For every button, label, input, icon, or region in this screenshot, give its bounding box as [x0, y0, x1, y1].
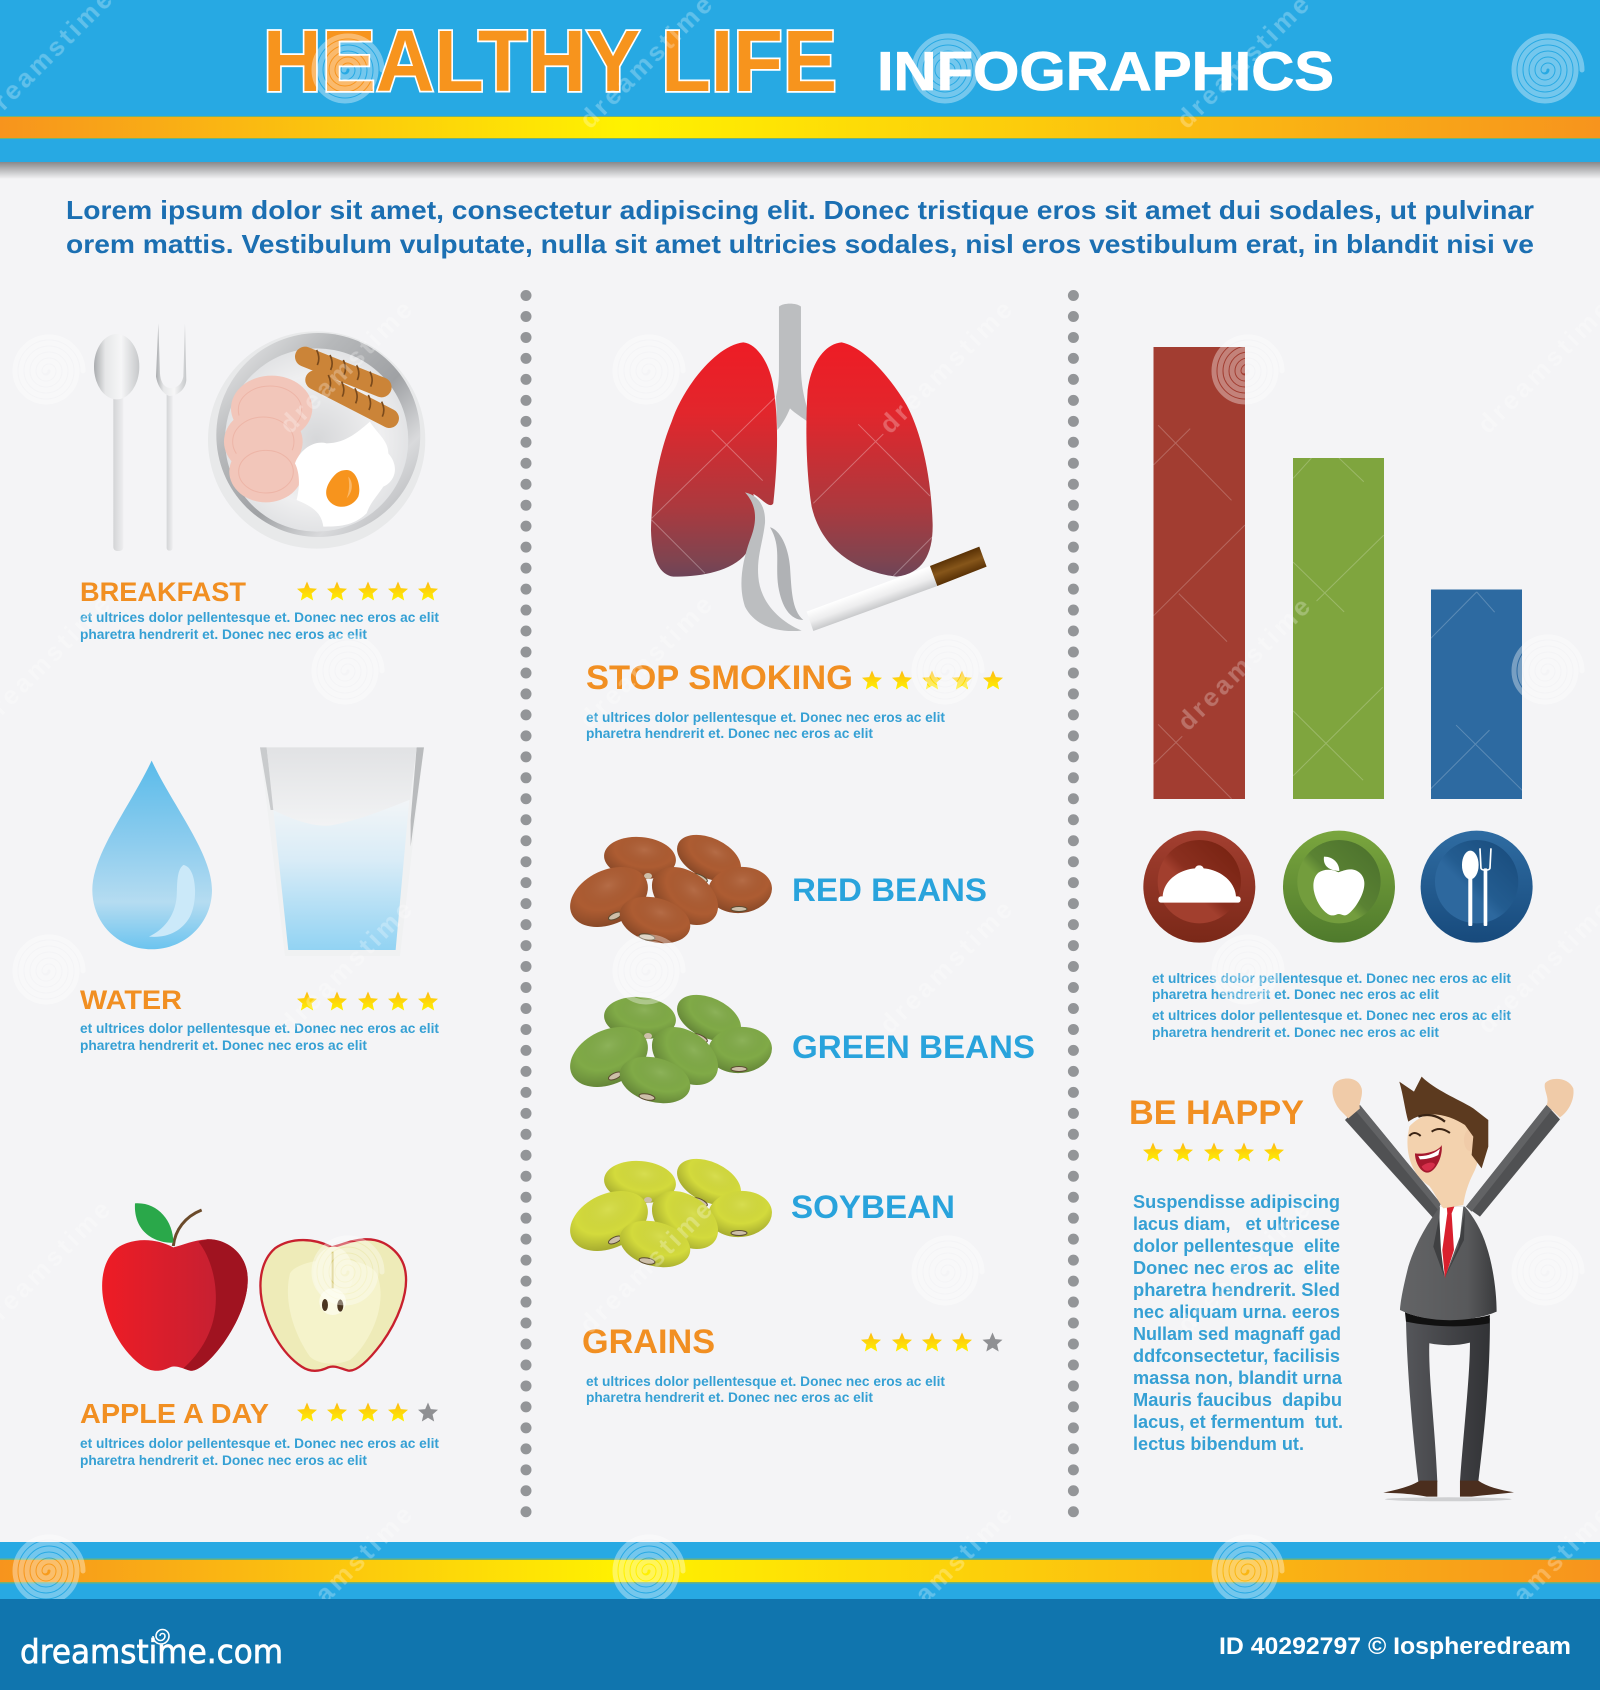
- rating stars: [1143, 1142, 1284, 1161]
- paragraph: dolor pellentesque elite: [1133, 1235, 1340, 1256]
- icon: fork: [156, 323, 186, 551]
- paragraph: Donec nec eros ac elite: [1133, 1257, 1340, 1278]
- heading: grains: GRAINS: [582, 1323, 715, 1361]
- icon: soybeans: [560, 1150, 774, 1275]
- watermark text: dreamstime: [873, 294, 1018, 439]
- label: green beans: GREEN BEANS: [792, 1029, 1035, 1065]
- paragraph: Nullam sed magnaff gad: [1133, 1323, 1341, 1344]
- paragraph: nec aliquam urna. eeros: [1133, 1301, 1340, 1322]
- heading: breakfast: BREAKFAST: [80, 577, 247, 607]
- paragraph: massa non, blandit urna: [1133, 1367, 1343, 1388]
- footer bands: [0, 1542, 1600, 1599]
- chart caption text: et ultrices dolor pellentesque et. Donec nec eros ac elit: [1152, 970, 1511, 986]
- chart icons: [1143, 831, 1533, 943]
- bar chart: [1154, 347, 1522, 799]
- intro text: Lorem ipsum dolor sit amet, consectetur adipiscing elit. Donec tristique eros sit amet dui sodales, ut pulvinar: [66, 195, 1534, 225]
- dotted divider right: [1068, 296, 1079, 1512]
- body text: et ultrices dolor pellentesque et. Donec nec eros ac elit: [80, 1020, 439, 1036]
- footer id: ID 40292797 © Iospheredream: [1219, 1633, 1571, 1660]
- heading: apple a day: APPLE A DAY: [80, 1398, 269, 1429]
- watermark text: dreamstime: [573, 1194, 718, 1339]
- icon: green beans: [560, 986, 774, 1111]
- chart caption text: pharetra hendrerit et. Donec nec eros ac elit: [1152, 986, 1439, 1002]
- icon: cloche: [1143, 831, 1255, 943]
- intro text: [66, 195, 1534, 259]
- footer credit bar: [0, 1599, 1600, 1690]
- panel: apple a day: [80, 1203, 439, 1468]
- icon: red beans: [560, 826, 774, 951]
- watermark text: dreamstime: [273, 894, 418, 1039]
- icon: spoon: [94, 334, 139, 551]
- body text: et ultrices dolor pellentesque et. Donec nec eros ac elit: [80, 1435, 439, 1451]
- paragraph: pharetra hendrerit. Sled: [1133, 1279, 1340, 1300]
- body text: pharetra hendrerit et. Donec nec eros ac elit: [586, 1389, 873, 1405]
- panel: stop smoking: [586, 304, 1003, 741]
- body text: et ultrices dolor pellentesque et. Donec nec eros ac elit: [80, 609, 439, 625]
- paragraph: lacus, et fermentum tut.: [1133, 1411, 1343, 1432]
- watermark text: dreamstime: [573, 589, 718, 734]
- icon: lungs and cigarette: [651, 304, 987, 631]
- icon: water drop: [92, 761, 212, 949]
- heading: stop smoking: STOP SMOKING: [586, 659, 853, 697]
- body text: pharetra hendrerit et. Donec nec eros ac elit: [586, 725, 873, 741]
- watermark text: dreamstime: [1171, 1194, 1316, 1339]
- heading: water: WATER: [80, 985, 182, 1015]
- watermark text: dreamstime: [873, 1499, 1018, 1644]
- rating stars: [297, 992, 438, 1010]
- body text: [80, 609, 439, 642]
- body text: pharetra hendrerit et. Donec nec eros ac elit: [80, 626, 367, 642]
- rating stars: [862, 670, 1003, 689]
- body text: [586, 709, 945, 741]
- title: infographics: INFOGRAPHICS: [877, 40, 1334, 102]
- rating stars: [297, 582, 438, 600]
- watermark text: dreamstime: [1171, 591, 1316, 736]
- label: red beans: RED BEANS: [792, 872, 987, 908]
- body text: [80, 1435, 439, 1468]
- body text: et ultrices dolor pellentesque et. Donec nec eros ac elit: [586, 709, 945, 725]
- rating stars: [297, 1402, 438, 1421]
- intro text: orem mattis. Vestibulum vulputate, nulla sit amet ultricies sodales, nisl eros vestibulum erat, in blandit nisi ve: [66, 229, 1534, 259]
- header banner: [0, 0, 1600, 179]
- body text: pharetra hendrerit et. Donec nec eros ac elit: [80, 1452, 367, 1468]
- icon: halved apple: [260, 1239, 406, 1371]
- footer logo swirl: [153, 1630, 169, 1644]
- chart caption text: et ultrices dolor pellentesque et. Donec nec eros ac elit: [1152, 1007, 1511, 1023]
- body text: [586, 1373, 945, 1405]
- panel: grains: [582, 1323, 1002, 1405]
- paragraph: Suspendisse adipiscing: [1133, 1191, 1340, 1212]
- paragraph: [1133, 1191, 1343, 1454]
- label: soybean: SOYBEAN: [791, 1189, 955, 1225]
- icon: apple: [1283, 831, 1395, 943]
- paragraph: lacus diam, et ultricese: [1133, 1213, 1340, 1234]
- icon: happy businessman: [1333, 1077, 1574, 1501]
- icon: spoon and fork: [1421, 831, 1533, 943]
- body text: et ultrices dolor pellentesque et. Donec nec eros ac elit: [586, 1373, 945, 1389]
- chart caption text: pharetra hendrerit et. Donec nec eros ac elit: [1152, 1024, 1439, 1040]
- paragraph: ddfconsectetur, facilisis: [1133, 1345, 1340, 1366]
- panel: breakfast: [80, 323, 439, 642]
- paragraph: lectus bibendum ut.: [1133, 1433, 1304, 1454]
- icon: glass of water: [260, 747, 424, 956]
- panel: be happy: [1129, 1077, 1574, 1501]
- footer logo: dreamstime.com: [20, 1632, 283, 1671]
- icon: whole apple: [102, 1203, 248, 1371]
- icon: breakfast plate: [208, 331, 425, 549]
- watermark text: dreamstime: [273, 294, 418, 439]
- body text: pharetra hendrerit et. Donec nec eros ac elit: [80, 1037, 367, 1053]
- rating stars: [861, 1332, 1002, 1351]
- watermark text: dreamstime: [873, 894, 1018, 1039]
- watermark text: dreamstime: [273, 1499, 418, 1644]
- body text: [80, 1020, 439, 1053]
- title: healthy life: HEALTHY LIFE: [263, 13, 837, 110]
- panel: water: [80, 747, 439, 1053]
- heading: be happy: BE HAPPY: [1129, 1094, 1304, 1132]
- chart caption text: [1152, 970, 1511, 1040]
- dotted divider left: [520, 296, 532, 1512]
- paragraph: Mauris faucibus dapibu: [1133, 1389, 1342, 1410]
